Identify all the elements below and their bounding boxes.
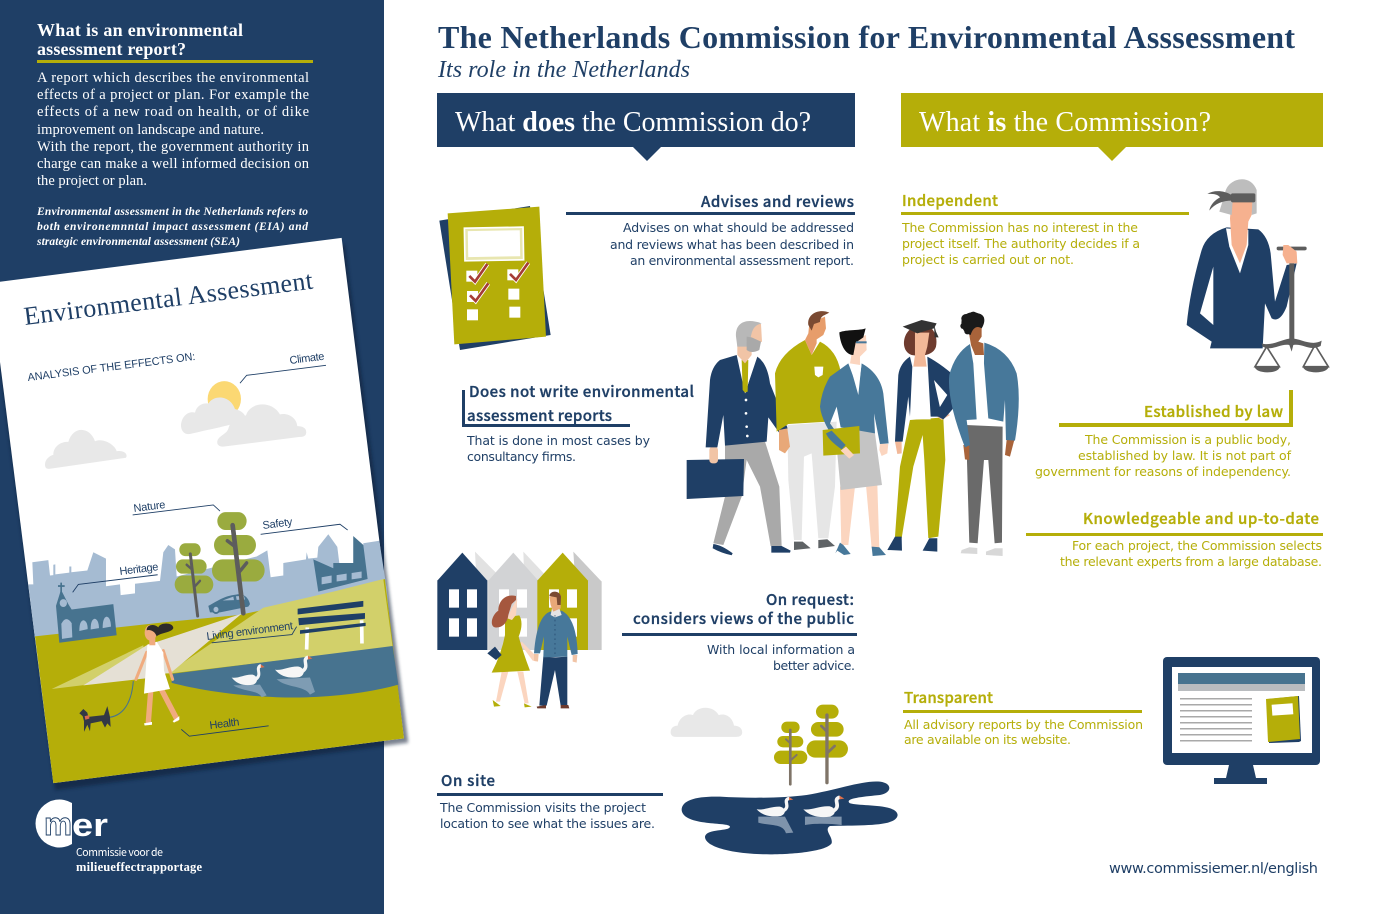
text block: knowledgeable and up-to-date xyxy=(1026,508,1323,569)
text block: advises and reviews: and reviews what has been described in xyxy=(610,237,854,252)
text block: EIA and SEA note: Environmental assessment in the Netherlands refers to xyxy=(36,206,308,218)
illustration: swans xyxy=(232,656,315,697)
logo: m.e.r commission xyxy=(36,799,202,874)
text block: report definition: With the report, the government authority in xyxy=(37,139,310,155)
text block: report definition: A report which describes the environmental xyxy=(37,70,309,86)
label: heritage: Heritage xyxy=(119,561,159,578)
illustration: bench xyxy=(298,601,366,650)
label: climate: Climate xyxy=(289,351,325,367)
text block: established by law xyxy=(1035,390,1293,479)
illustration: group of people xyxy=(687,311,1019,556)
heading: what is an environmental assessment report: What is an environmental xyxy=(37,20,243,40)
illustration: clouds and sun xyxy=(45,381,306,469)
illustration: church xyxy=(56,583,117,643)
text block: advises and reviews xyxy=(566,191,855,268)
person: man in olive shirt xyxy=(775,311,841,550)
text block: transparent: are available on its website. xyxy=(904,732,1071,747)
text block: on site: location to see what the issues are. xyxy=(440,816,655,831)
person: man in teal cardigan xyxy=(949,312,1019,556)
text block: EIA and SEA note: strategic environmental assessment (SEA) xyxy=(36,236,240,248)
text block: does not write reports: assessment reports xyxy=(467,405,612,426)
text block: independent: project is carried out or not. xyxy=(902,252,1074,267)
text block: does not write reports: consultancy firms. xyxy=(467,449,576,464)
text block: established by law: The Commission is a public body, xyxy=(1084,432,1291,447)
text block: advises and reviews: an environmental assessment report. xyxy=(630,253,854,268)
person: graduate xyxy=(887,320,963,552)
panel heading: what is the commission: What is the Commission? xyxy=(919,107,1211,138)
text block: on site xyxy=(437,770,663,831)
heading: what is an environmental assessment report: assessment report? xyxy=(37,39,186,59)
text block: on request: With local information a xyxy=(707,642,855,657)
text block: independent: project itself. The authority decides if a xyxy=(902,236,1140,251)
illustration: grass xyxy=(35,579,404,783)
logo: m.e.r commission: er xyxy=(72,807,108,843)
text block: established by law: Established by law xyxy=(1144,401,1284,422)
text block: on request: On request: xyxy=(766,589,854,610)
person: man with briefcase xyxy=(687,321,799,555)
text block: knowledgeable and up-to-date: For each project, the Commission selects xyxy=(1072,538,1322,553)
text block: does not write reports: That is done in most cases by xyxy=(466,433,651,448)
text block: on request: considers views of the public xyxy=(633,608,854,629)
icon: computer monitor xyxy=(1163,657,1320,784)
logo: m.e.r commission: milieueffectrapportage xyxy=(76,860,202,874)
illustration: cloud, trees and pond with swans xyxy=(671,705,898,854)
panel: environmental assessment report cover xyxy=(0,238,408,790)
icon: houses xyxy=(437,552,602,650)
text block: on request xyxy=(622,589,857,673)
text block: on site: On site xyxy=(441,770,495,791)
illustration: city skyline xyxy=(28,534,390,638)
label: nature: Nature xyxy=(133,499,166,515)
text block: established by law: established by law. It is not part of xyxy=(1078,448,1292,463)
text block: EIA and SEA note xyxy=(36,206,308,248)
illustration: lady justice xyxy=(1187,179,1329,372)
title: The Netherlands Commission for Environmental Asssessment xyxy=(438,19,1295,55)
text block: report definition: charge can make a well informed decision on xyxy=(37,156,310,172)
text block: does not write reports: Does not write environmental xyxy=(469,381,694,402)
text block: on site: The Commission visits the project xyxy=(439,800,646,815)
text block: transparent: Transparent xyxy=(904,687,993,708)
illustration: couple xyxy=(487,592,578,708)
panel heading: what does the commission do xyxy=(437,93,855,161)
text block: on request: better advice. xyxy=(773,658,855,673)
report title: Environmental Assessment xyxy=(22,266,315,331)
text block: report definition: the project or plan. xyxy=(37,173,147,189)
logo: m.e.r commission: Commissie voor de xyxy=(76,845,163,860)
text block: report definition: effects of a project or plan. For example the xyxy=(37,87,309,103)
panel: sidebar xyxy=(0,0,384,914)
illustration: factory xyxy=(313,536,368,592)
text block: report definition: improvement on landscape and nature. xyxy=(37,122,264,138)
logo: m.e.r commission: m xyxy=(44,806,72,842)
text block: advises and reviews: Advises on what should be addressed xyxy=(623,220,854,235)
panel heading: what is the commission xyxy=(901,93,1323,161)
illustration: car xyxy=(208,594,250,613)
text block: established by law: government for reasons of independency. xyxy=(1035,464,1291,479)
text block: independent xyxy=(901,190,1189,267)
text block: knowledgeable and up-to-date: the relevant experts from a large database. xyxy=(1060,554,1322,569)
text block: advises and reviews: Advises and reviews xyxy=(701,191,854,212)
illustration: trees xyxy=(175,512,265,616)
text block: EIA and SEA note: both environemnntal impact assessment (EIA) and xyxy=(37,221,308,233)
label leader lines xyxy=(73,365,348,736)
illustration: pond xyxy=(172,646,398,698)
website url: www.commissiemer.nl/english xyxy=(1109,861,1318,877)
icon: report checklist xyxy=(439,206,551,350)
panel heading: what does the commission do: What does the Commission do? xyxy=(455,107,811,138)
text block: knowledgeable and up-to-date: Knowledgeable and up-to-date xyxy=(1083,508,1319,529)
label: health: Health xyxy=(209,716,240,732)
subtitle: Its role in the Netherlands xyxy=(437,57,690,83)
illustration: hill xyxy=(167,579,393,674)
label: living environment: Living environment xyxy=(206,620,294,643)
text block: transparent: All advisory reports by the Commission xyxy=(904,717,1143,732)
text block: report definition xyxy=(37,70,310,189)
text block: report definition: effects of a new road on health, or of dike xyxy=(37,104,309,120)
report subtitle: ANALYSIS OF THE EFFECTS ON: xyxy=(27,351,196,384)
text block: transparent xyxy=(903,687,1143,747)
person: woman with folder xyxy=(820,328,889,556)
heading: what is an environmental assessment report xyxy=(37,20,313,63)
label: safety: Safety xyxy=(262,516,294,532)
text block: independent: The Commission has no interest in the xyxy=(901,220,1138,235)
illustration: woman walking dog xyxy=(107,623,179,725)
text block: does not write reports xyxy=(462,381,694,464)
text block: independent: Independent xyxy=(902,190,998,211)
illustration: dog xyxy=(79,706,111,732)
illustration: footpath xyxy=(52,614,242,689)
